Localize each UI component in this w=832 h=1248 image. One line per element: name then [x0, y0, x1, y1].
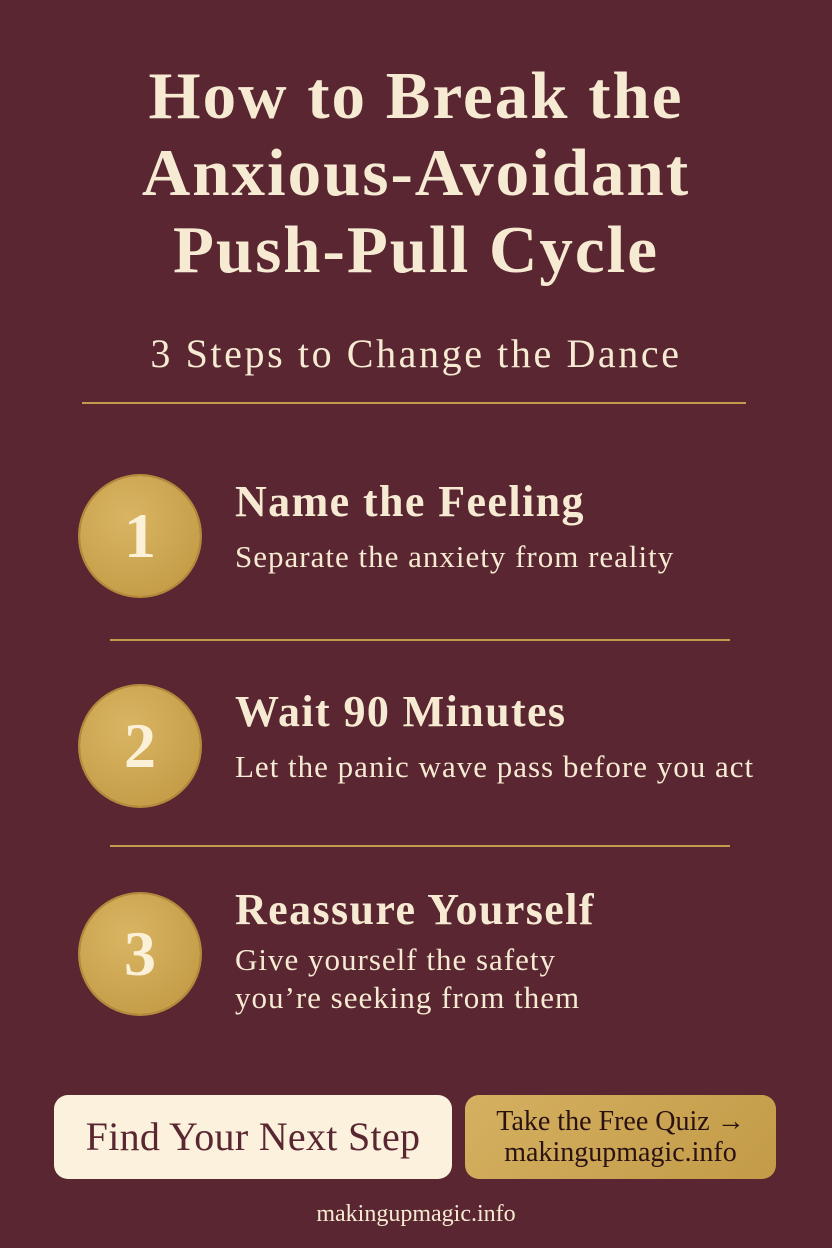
heading 2: Wait 90 Minutes — [235, 687, 566, 736]
step 2 — [78, 684, 754, 808]
title: Push-Pull Cycle — [173, 213, 659, 287]
icon: number 2: 2 — [124, 710, 156, 781]
text 3: Give yourself the safety — [235, 942, 556, 977]
icon: number 2 — [80, 686, 200, 806]
button: quiz: makingupmagic.info — [504, 1137, 737, 1168]
button: quiz — [465, 1095, 776, 1179]
heading 3: Reassure Yourself — [235, 885, 595, 934]
text 2: Let the panic wave pass before you act — [235, 749, 754, 784]
footer: makingupmagic.info — [316, 1201, 516, 1227]
step 3 — [78, 885, 595, 1016]
subtitle: 3 Steps to Change the Dance — [150, 331, 682, 376]
button: find your next step — [54, 1095, 452, 1179]
title — [142, 59, 690, 287]
icon: number 1 — [80, 476, 200, 596]
icon: number 1: 1 — [124, 500, 156, 571]
icon: number 3: 3 — [124, 918, 156, 989]
step 1 — [78, 474, 674, 598]
title: Anxious-Avoidant — [142, 136, 690, 210]
text 1: Separate the anxiety from reality — [235, 539, 674, 574]
text 3 — [235, 942, 580, 1015]
icon: number 3 — [80, 894, 200, 1014]
text 3: you’re seeking from them — [235, 980, 580, 1015]
heading 1: Name the Feeling — [235, 477, 585, 526]
title: How to Break the — [148, 59, 684, 133]
button: quiz: Take the Free Quiz → — [496, 1106, 745, 1137]
button: find your next step: Find Your Next Step — [86, 1114, 420, 1159]
